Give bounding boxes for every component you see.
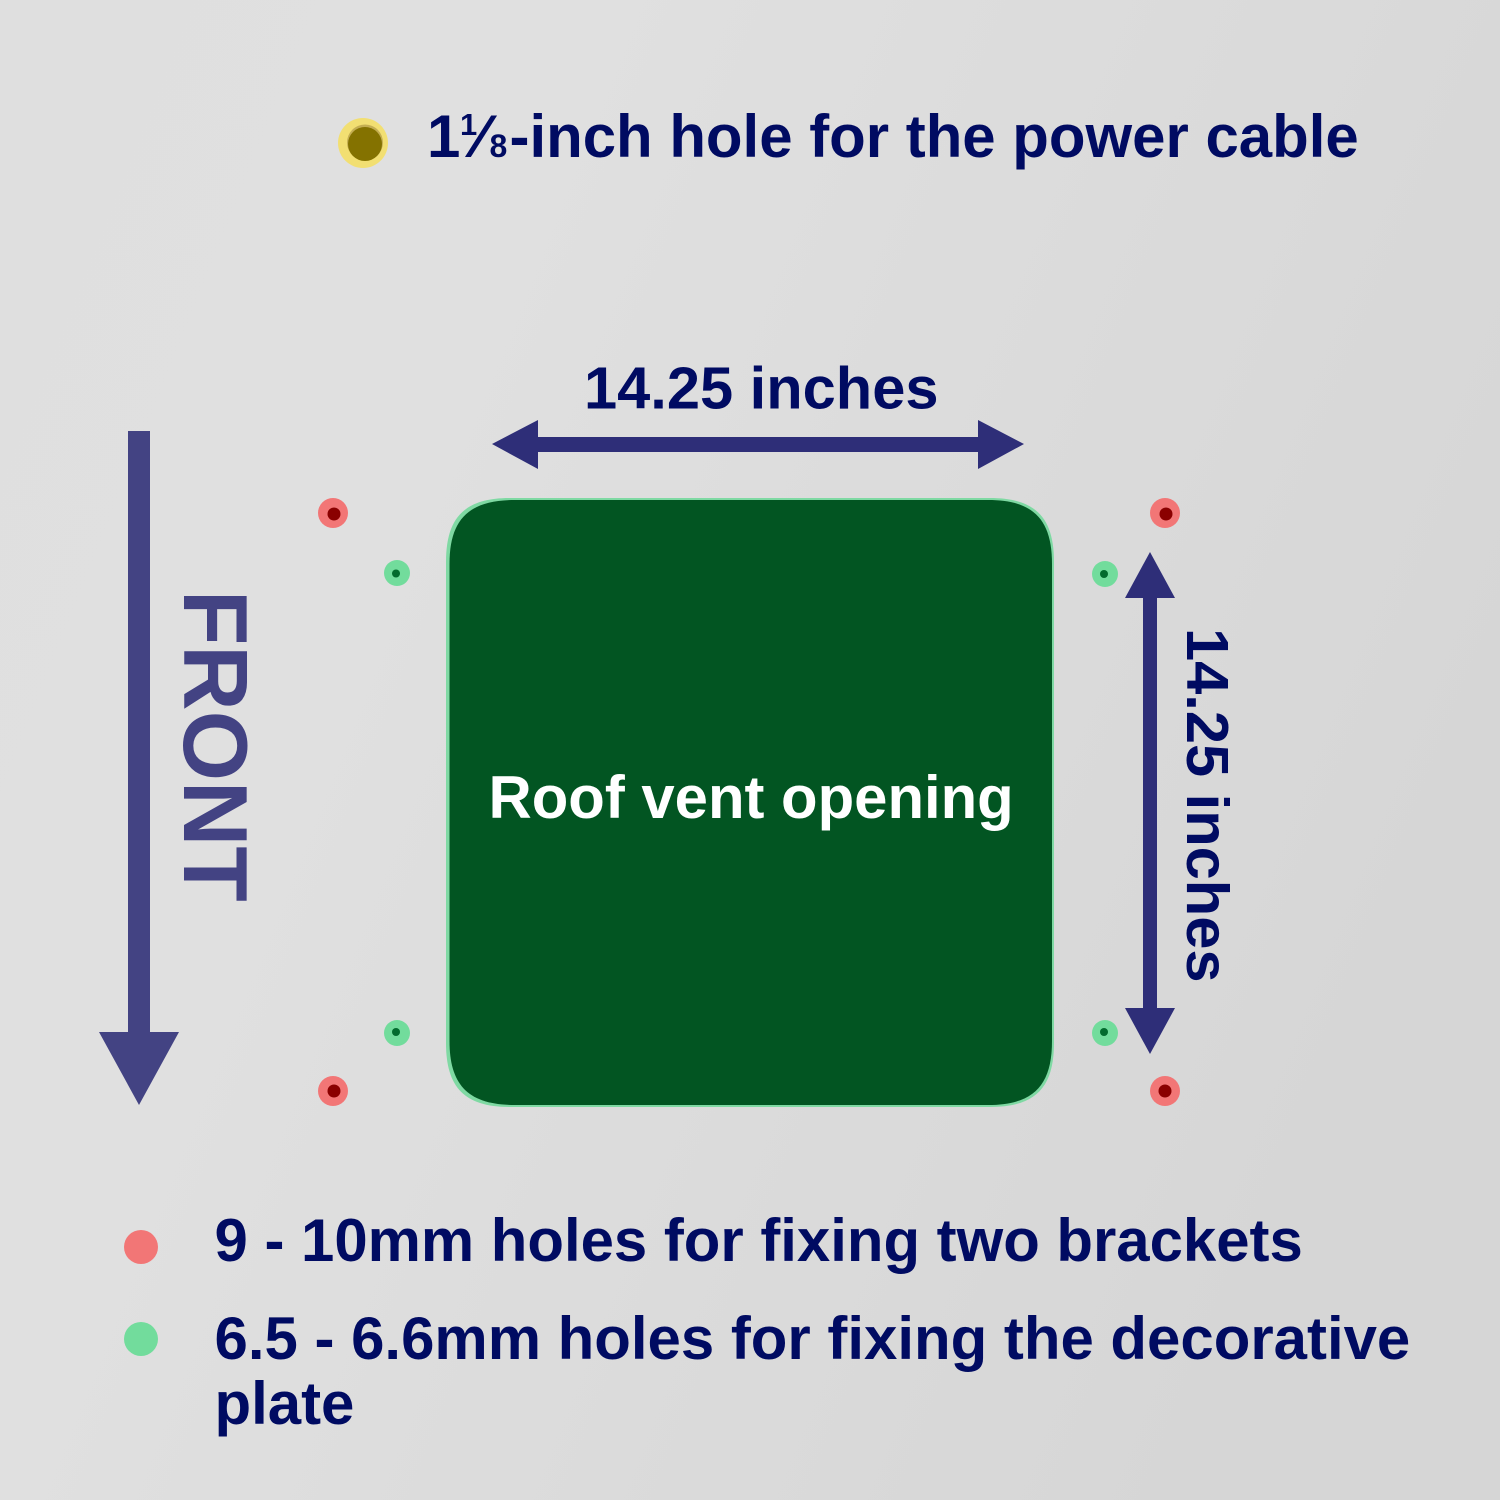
icon: yellow power cable hole	[338, 118, 388, 168]
width dimension	[492, 354, 1024, 469]
hole: bracket top right	[1150, 498, 1180, 528]
hole: bracket bottom right	[1150, 1076, 1180, 1106]
legend: bracket holes	[124, 1207, 1303, 1274]
decorative plate holes	[384, 560, 1118, 1046]
front direction indicator	[99, 431, 265, 1105]
height dimension label: 14.25 inches	[1174, 628, 1241, 982]
power cable hole label: 1	[460, 107, 477, 142]
roof vent opening	[446, 498, 1054, 1107]
arrow: width double-headed	[492, 420, 1024, 469]
icon: green dot	[124, 1322, 158, 1356]
power cable hole label: 1	[427, 103, 460, 170]
hole: plate bottom left	[384, 1020, 410, 1046]
vent opening fill	[450, 500, 1052, 1105]
height dimension	[1125, 552, 1241, 1054]
hole: plate bottom right	[1092, 1020, 1118, 1046]
power cable hole label: ⁄	[464, 103, 498, 170]
hole: plate top left	[384, 560, 410, 586]
vent opening label: Roof vent opening	[488, 764, 1014, 831]
power cable hole label: 8	[490, 128, 507, 164]
icon: red dot	[124, 1230, 158, 1264]
legend: decorative plate holes	[124, 1305, 1410, 1437]
power cable hole label: -inch hole for the power cable	[510, 103, 1359, 170]
bracket holes label: 9 - 10mm holes for fixing two brackets	[214, 1207, 1303, 1274]
arrow: height double-headed	[1125, 552, 1175, 1054]
decorative plate holes label: 6.5 - 6.6mm holes for fixing the decorative	[214, 1305, 1410, 1372]
bracket holes	[318, 498, 1180, 1106]
arrow: front direction	[99, 431, 179, 1105]
hole: bracket top left	[318, 498, 348, 528]
width dimension label: 14.25 inches	[584, 354, 938, 422]
vent opening outline	[446, 498, 1054, 1107]
front label: FRONT	[164, 590, 265, 902]
decorative plate holes label: plate	[214, 1370, 354, 1437]
legend: power cable hole	[338, 103, 1359, 170]
hole: plate top right	[1092, 561, 1118, 587]
hole: bracket bottom left	[318, 1076, 348, 1106]
